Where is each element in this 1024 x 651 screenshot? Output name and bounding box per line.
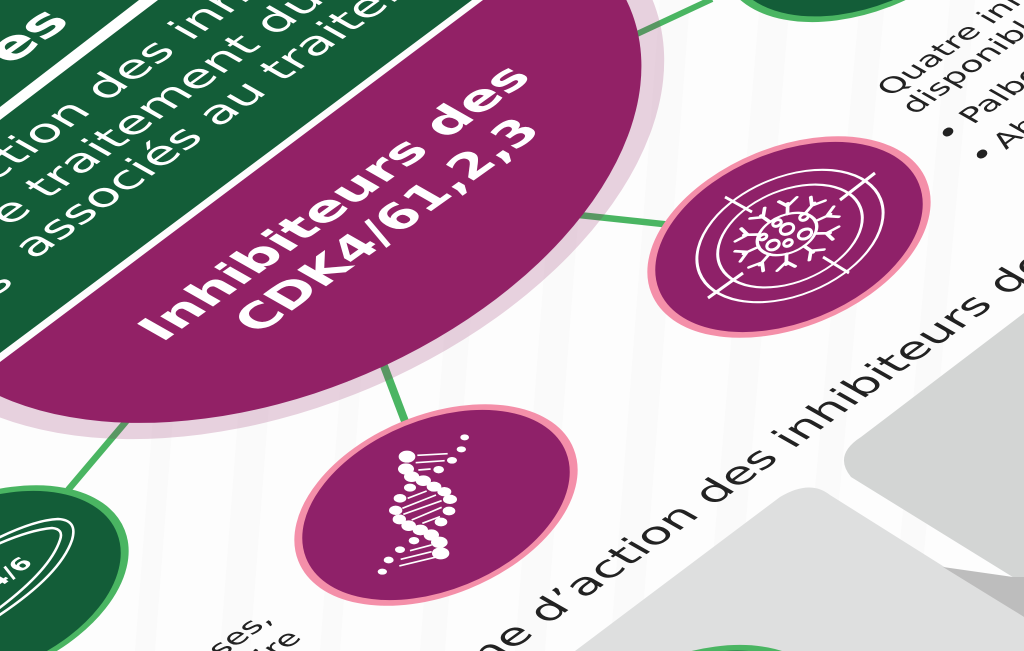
icon: CDK4/6 rings <box>0 519 73 616</box>
text block: available inhibitors <box>870 0 1024 160</box>
node: bottom green circle <box>501 610 881 651</box>
text block: lower left <box>152 608 346 651</box>
icon: target rings and crosshair <box>660 144 920 328</box>
panel: grey upper right <box>844 313 1024 584</box>
icon: cancer cell <box>715 183 859 285</box>
main circle: Inhibiteurs des CDK4/6 <box>0 0 820 549</box>
bullet <box>941 126 955 138</box>
node: top green circle <box>671 0 1024 57</box>
bullet <box>975 148 989 160</box>
panel fold shadow <box>943 567 1024 617</box>
panel: grey lower <box>575 487 1024 651</box>
connector lines <box>68 0 712 490</box>
label: Inhibiteurs des CDK4/6: CDK4/61,2,3 <box>221 110 553 340</box>
node: target cell icon circle <box>597 101 981 373</box>
node: DNA icon circle <box>244 369 628 641</box>
green header panel <box>0 0 563 362</box>
node: CDK4/6 green circle <box>0 450 179 651</box>
label: Inhibiteurs des CDK4/6: Inhibiteurs des <box>125 56 542 348</box>
icon: DNA helix <box>378 435 469 574</box>
